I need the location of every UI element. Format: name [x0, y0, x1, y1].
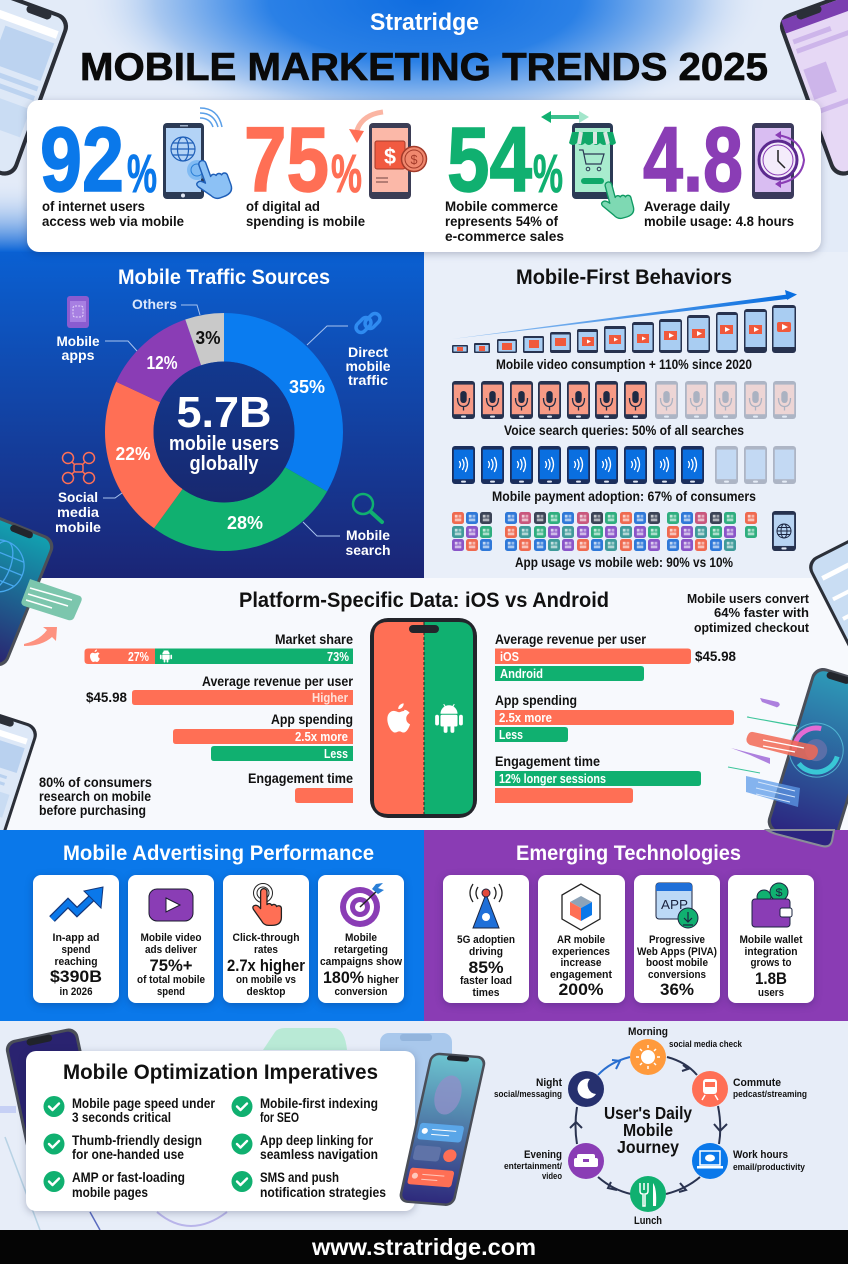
card: 5G: times — [472, 987, 500, 999]
callout: social media mobile: mobile — [55, 520, 102, 535]
card: click-through — [223, 875, 309, 1003]
icon: wallet: $ — [776, 887, 782, 899]
label: evening: video — [542, 1171, 562, 1181]
callout: mobile search: search — [346, 543, 390, 558]
label: evening: Evening — [524, 1149, 562, 1161]
stat: research: 80% of consumers — [39, 774, 152, 790]
card: 5G: driving — [469, 946, 503, 958]
panel: emerging technologies — [424, 830, 848, 1021]
label: night: social/messaging — [494, 1089, 562, 1099]
card: 5G: 85% — [468, 958, 504, 977]
stat: checkout: 64% faster with — [714, 605, 809, 620]
stat: 54%: e-commerce sales — [445, 228, 564, 244]
card: retargeting: retargeting — [334, 944, 388, 956]
card: PWA: boost mobile — [646, 957, 708, 969]
panel: traffic sources — [0, 252, 424, 578]
video phones row — [452, 305, 796, 353]
phone: lower left — [0, 690, 40, 846]
icon: phone money: $ — [384, 144, 396, 169]
caption: payment: Mobile payment adoption: 67% of consumers — [492, 488, 756, 504]
card: wallet: grows to — [750, 957, 792, 969]
logo: Stratridge — [370, 9, 479, 36]
donut chart: 12% — [146, 353, 178, 373]
left chart: app spending: App spending — [271, 711, 353, 727]
card: in-app spend: $390B — [50, 967, 102, 986]
icon: trend arrow — [52, 887, 103, 919]
callout: social media mobile — [55, 452, 122, 535]
callout: mobile search — [303, 494, 391, 558]
right chart: average revenue: iOS — [500, 650, 519, 664]
list item — [44, 1170, 185, 1200]
list item — [44, 1133, 202, 1162]
card: PWA — [634, 875, 720, 1003]
arrow: growth — [452, 290, 797, 339]
list item: AMP or fast-loading — [72, 1170, 185, 1185]
list item: Mobile-first indexing — [260, 1096, 378, 1111]
icon: target — [340, 883, 384, 927]
card: retargeting: higher — [367, 974, 400, 986]
card: click-through: 2.7x higher — [227, 956, 305, 975]
right chart: app spending: 2.5x more — [499, 711, 552, 725]
card: PWA: Progressive — [649, 934, 705, 946]
icon: tower — [470, 884, 502, 928]
left chart: app spending: 2.5x more — [295, 730, 348, 744]
left chart: average revenue: Higher — [312, 691, 348, 705]
heading: Platform-Specific Data: iOS vs Android — [239, 589, 609, 612]
right chart: app spending: Less — [499, 728, 523, 742]
stat: 92%: of internet users — [42, 198, 145, 214]
title: MOBILE MARKETING TRENDS 2025 — [80, 46, 768, 89]
footer: www.stratridge.com — [311, 1234, 536, 1260]
callout: social media mobile: Social — [58, 490, 98, 505]
panel: platform data — [0, 503, 848, 851]
card: AR: increase — [560, 957, 602, 969]
card: wallet: Mobile wallet — [740, 934, 803, 946]
heading: Emerging Technologies — [516, 842, 741, 865]
phone bottom overlap — [767, 830, 834, 846]
list item: mobile pages — [72, 1185, 148, 1200]
left chart: average revenue: Average revenue per user — [202, 673, 353, 689]
stat: 75% — [244, 109, 426, 229]
panel: behaviors — [424, 252, 848, 578]
card: retargeting: campaigns show — [320, 956, 402, 968]
donut chart: 22% — [116, 444, 150, 464]
stat: 54%: Mobile commerce — [445, 198, 558, 214]
donut chart: 28% — [227, 513, 263, 533]
stat: 54%: 54 — [447, 109, 532, 211]
donut chart: globally — [190, 453, 259, 475]
list item: SMS and push — [260, 1170, 339, 1185]
callout: direct mobile traffic — [307, 311, 391, 388]
caption: voice: Voice search queries: 50% of all searches — [504, 422, 744, 438]
list item — [232, 1096, 378, 1125]
phone: right hero — [728, 665, 848, 851]
heading: Mobile Traffic Sources — [118, 266, 330, 289]
card: retargeting: 180% — [323, 968, 364, 987]
center label: User's Daily — [604, 1103, 692, 1123]
callout: others — [132, 297, 200, 315]
card: retargeting: Mobile — [345, 932, 377, 944]
left chart: market share — [84, 631, 353, 664]
left chart: engagement — [248, 770, 353, 803]
callout: mobile apps: apps — [62, 348, 94, 363]
stat: research — [39, 774, 152, 818]
central phone: iOS vs Android — [370, 618, 477, 818]
phone: top right — [776, 0, 848, 180]
stat: 4.8: mobile usage: 4.8 hours — [644, 213, 794, 229]
center label: Mobile — [623, 1120, 673, 1140]
list item — [232, 1133, 378, 1162]
node: commute — [692, 1071, 728, 1107]
left chart: average revenue: $45.98 — [86, 690, 127, 705]
journey cycle — [494, 1026, 807, 1227]
icon: phone globe tap — [163, 108, 234, 204]
stat: research: research on mobile — [39, 788, 151, 804]
card: wallet — [728, 875, 814, 1003]
icon: phone clock — [752, 123, 804, 199]
phone: top left — [0, 0, 72, 180]
icon: phone shop — [541, 111, 635, 222]
right chart: app spending — [495, 692, 734, 742]
stat card — [27, 100, 821, 252]
card: AR: 200% — [558, 980, 604, 999]
icon: social network — [62, 452, 94, 484]
card: optimization imperatives — [26, 1051, 415, 1211]
left chart: app spending: Less — [324, 747, 348, 761]
card: video ads: 75%+ — [150, 956, 193, 975]
stat: research: before purchasing — [39, 802, 146, 818]
card: AR: AR mobile — [557, 934, 605, 946]
right chart: average revenue: $45.98 — [695, 649, 736, 664]
list item: 3 seconds critical — [72, 1110, 171, 1125]
card: in-app spend: in 2026 — [60, 986, 92, 998]
left chart: engagement: Engagement time — [248, 770, 353, 786]
stat: 75%: % — [331, 144, 362, 204]
donut chart: mobile users — [169, 433, 279, 455]
card: in-app spend: spend — [62, 944, 90, 956]
node: night — [568, 1071, 604, 1107]
footer — [0, 1230, 848, 1264]
icon: AR cube — [562, 884, 600, 930]
card: PWA: conversions — [648, 969, 706, 981]
right chart: average revenue: Android — [500, 667, 543, 681]
right chart: engagement: Engagement time — [495, 753, 600, 769]
card: retargeting — [318, 875, 404, 1003]
card: video ads — [128, 875, 214, 1003]
label: night: Night — [536, 1077, 562, 1089]
label: evening — [504, 1149, 562, 1181]
icon: app window: APP — [661, 898, 688, 912]
donut chart — [105, 313, 343, 551]
list item: App deep linking for — [260, 1133, 374, 1148]
icon: phone money — [349, 112, 426, 199]
card: wallet: users — [758, 987, 784, 999]
app icon grid — [452, 512, 757, 551]
list item — [44, 1096, 216, 1125]
heading: Mobile Optimization Imperatives — [63, 1061, 378, 1084]
icon: play — [149, 889, 193, 921]
icon: globe phone — [772, 511, 796, 551]
stat: 4.8: 4.8 — [643, 109, 743, 211]
callout: others: Others — [132, 297, 177, 312]
card: 5G: faster load — [460, 975, 512, 987]
donut chart: 5.7B — [176, 388, 272, 437]
panel: bottom section — [0, 1021, 848, 1230]
left chart: average revenue — [86, 673, 353, 705]
stat: 54% — [445, 109, 635, 244]
label: morning: Morning — [628, 1026, 668, 1038]
stat: checkout — [687, 591, 810, 635]
donut chart: 35% — [289, 377, 325, 397]
label: morning: social media check — [669, 1039, 743, 1049]
header band — [0, 0, 848, 252]
icon: tap hand — [253, 884, 281, 925]
label: morning — [628, 1026, 743, 1049]
card: in-app spend: reaching — [54, 956, 98, 968]
stat: 92% — [40, 108, 234, 229]
phone: upper right — [805, 517, 848, 673]
label: work hours: email/productivity — [733, 1162, 805, 1172]
label: work hours — [733, 1149, 805, 1172]
list item: for one-handed use — [72, 1147, 184, 1162]
caption: video: Mobile video consumption + 110% since 2020 — [496, 356, 752, 372]
phone: bottom left — [4, 1027, 103, 1169]
stat: 75%: of digital ad — [246, 198, 320, 214]
node: morning — [630, 1039, 666, 1075]
stat: checkout: optimized checkout — [694, 620, 810, 635]
left chart: app spending — [173, 711, 353, 761]
background decoration — [0, 1028, 452, 1230]
label: night — [494, 1077, 562, 1099]
node: work hours — [692, 1143, 728, 1179]
voice phones row — [452, 381, 796, 419]
callout: mobile apps — [56, 296, 137, 363]
stat: 4.8: Average daily — [644, 198, 730, 214]
card: click-through: rates — [254, 944, 278, 956]
card: click-through: desktop — [246, 986, 286, 998]
arcs and arrows — [570, 1057, 727, 1194]
label: evening: entertainment/ — [504, 1161, 562, 1171]
callout: mobile apps: Mobile — [56, 334, 100, 349]
card: PWA: 36% — [660, 980, 694, 999]
card: 5G — [443, 875, 529, 1003]
stat: 54%: represents 54% of — [445, 213, 558, 229]
right chart: engagement: 12% longer sessions — [499, 772, 606, 786]
card: AR: engagement — [550, 969, 612, 981]
left chart: market share: 27% — [128, 650, 149, 664]
card: in-app spend — [33, 875, 119, 1003]
phone: bottom right — [398, 1052, 487, 1207]
node: evening — [568, 1143, 604, 1179]
card: retargeting: conversion — [334, 986, 388, 998]
card: video ads: Mobile video — [140, 932, 202, 944]
stat: 4.8 — [643, 109, 804, 229]
icon: purple phone — [67, 296, 89, 328]
right chart: app spending: App spending — [495, 692, 577, 708]
donut chart: 3% — [196, 328, 220, 348]
label: work hours: Work hours — [733, 1149, 788, 1161]
callout: direct mobile traffic: traffic — [348, 373, 389, 388]
left chart: market share: 73% — [327, 650, 349, 664]
card: wallet: 1.8B — [755, 969, 787, 988]
card: 5G: 5G adoptien — [457, 934, 515, 946]
card: AR — [538, 875, 625, 1003]
label: commute: pedcast/streaming — [733, 1089, 807, 1099]
panel: advertising performance — [0, 830, 424, 1021]
card: video ads: spend — [157, 986, 185, 998]
list item: Thumb-friendly design — [72, 1133, 202, 1148]
right chart: engagement — [495, 753, 701, 803]
card: click-through: on mobile vs — [236, 974, 296, 986]
label: commute — [733, 1077, 807, 1099]
stat: 92%: 92 — [40, 109, 124, 211]
center label: Journey — [617, 1137, 679, 1157]
heading: Mobile Advertising Performance — [63, 842, 374, 865]
icon: phone money: $ — [410, 152, 418, 167]
stat: checkout: Mobile users convert — [687, 591, 810, 606]
center label — [604, 1103, 692, 1157]
callout: direct mobile traffic: mobile — [346, 359, 391, 374]
list item: seamless navigation — [260, 1147, 378, 1162]
list item — [232, 1170, 386, 1200]
label: commute: Commute — [733, 1077, 781, 1089]
icon: link — [354, 311, 382, 335]
right chart: average revenue: Average revenue per user — [495, 631, 646, 647]
stat: 75%: 75 — [244, 109, 329, 211]
caption: apps: App usage vs mobile web: 90% vs 10% — [515, 554, 733, 570]
stat: 75%: spending is mobile — [246, 213, 365, 229]
card: AR: experiences — [552, 946, 610, 958]
card: PWA: Web Apps (PIVA) — [637, 946, 717, 958]
callout: direct mobile traffic: Direct — [348, 345, 389, 360]
list item: notification strategies — [260, 1185, 386, 1200]
icon: magnifier — [353, 494, 382, 522]
list item: Mobile page speed under — [72, 1096, 216, 1111]
callout: mobile search: Mobile — [346, 528, 391, 543]
node: lunch — [630, 1176, 666, 1212]
card: wallet: integration — [744, 946, 798, 958]
payment phones row — [452, 446, 796, 484]
stat: 92%: access web via mobile — [42, 213, 184, 229]
card: video ads: of total mobile — [137, 974, 205, 986]
card: click-through: Click-through — [232, 932, 300, 944]
list item: for SEO — [260, 1110, 299, 1125]
left chart: market share: Market share — [275, 631, 353, 647]
stat: 92%: % — [127, 144, 157, 204]
card: in-app spend: In-app ad — [52, 932, 100, 944]
card: video ads: ads deliver — [145, 944, 198, 956]
heading: Mobile-First Behaviors — [516, 266, 732, 289]
phone: mid left — [0, 503, 82, 670]
label: lunch: Lunch — [634, 1215, 662, 1227]
stat: 54%: % — [533, 144, 563, 204]
callout: social media mobile: media — [57, 505, 100, 520]
right chart: average revenue — [495, 631, 736, 681]
